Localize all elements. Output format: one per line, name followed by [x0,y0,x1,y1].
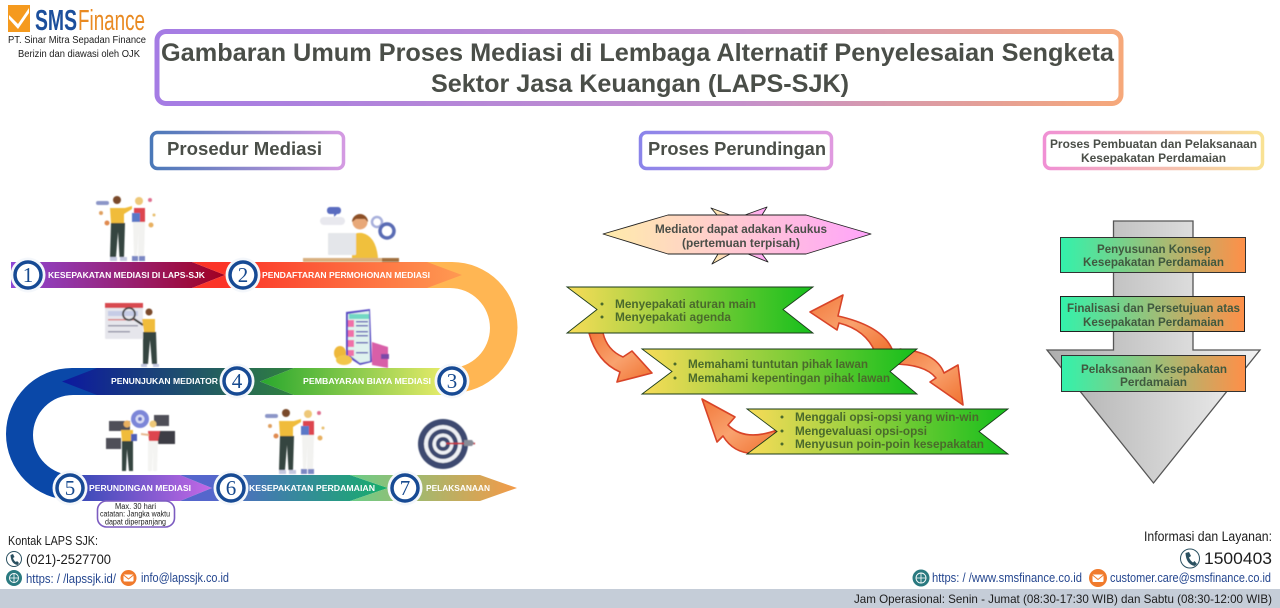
badge 4: 4 [232,369,243,393]
box: pelaksanaan kesepakatan: Pelaksanaan Kesepakatan [1081,362,1227,376]
note: max 30 hari: dapat diperpanjang [105,518,166,526]
ribbon: tuntutan dan kepentingan: Memahami kepentingan pihak lawan [688,371,890,385]
step 3 band: PEMBAYARAN BIAYA MEDIASI [303,377,431,386]
box: penyusunan konsep: Penyusunan Konsep [1097,242,1211,256]
logo: SMS Finance: SMS [35,5,77,37]
step 5 band [70,475,212,501]
badge 1 [10,258,46,292]
step 2 band [192,262,462,288]
icon: mail [1089,569,1107,587]
badge 6 [214,470,248,506]
ribbon: aturan main: Menyepakati aturan main [615,297,756,311]
badge 2: 2 [238,263,248,287]
heading: Prosedur Mediasi: Prosedur Mediasi [167,139,322,159]
title: Sektor Jasa Keuangan (LAPS-SJK) [431,70,849,98]
step 7 band [350,475,517,501]
step 1 band [11,262,225,288]
panel: procedure road [6,258,518,527]
logo: SMS Finance: Berizin dan diawasi oleh OJK [18,49,140,60]
box: finalisasi dan persetujuan: Kesepakatan Perdamaian [1083,315,1224,329]
step 6 band: KESEPAKATAN PERDAMAIAN [249,484,375,493]
icon: page and magnifier, step 4 [105,303,159,367]
logo: SMS Finance: Finance [78,5,145,37]
callout: kaukus star [603,207,871,264]
icon: two people, step 1 [96,196,156,261]
heading: Prosedur Mediasi [152,132,344,168]
contact: LAPS SJK: (021)-2527700 [26,552,111,567]
badge 6: 6 [226,476,236,500]
heading: Proses Perundingan [640,132,832,168]
contact: SMS Finance services: 1500403 [1204,549,1272,568]
note: max 30 hari [98,501,174,527]
contact: SMS Finance services: https: / /www.smsfinance.co.id [932,570,1082,585]
box: penyusunan konsep [1060,238,1246,272]
badge 2 [226,258,260,292]
arrow: big downward arrow [1047,221,1260,483]
icon: two people with charts, step 5 [106,410,175,471]
callout: kaukus star: Mediator dapat adakan Kaukus [655,224,827,236]
note: max 30 hari: Max. 30 hari [115,502,156,511]
step 4 band [62,368,294,395]
box: finalisasi dan persetujuan [1060,296,1244,332]
heading: Proses Pembuatan dan Pelaksanaan: Proses Pembuatan dan Pelaksanaan [1050,137,1257,151]
step 4 band: PENUNJUKAN MEDIATOR [111,377,218,386]
contact: SMS Finance services [912,529,1272,587]
box: penyusunan konsep: Kesepakatan Perdamaian [1083,255,1224,269]
footer bar [0,589,1280,608]
ribbon: opsi dan kesepakatan: Mengevaluasi opsi-opsi [795,424,927,438]
icon: phone large [1180,549,1200,568]
road curve: right [425,262,518,393]
icon: globe [6,570,22,586]
icon: call-centre operator, step 2 [303,207,399,262]
heading: Proses Pembuatan dan Pelaksanaan [1044,132,1262,168]
icon: globe [912,570,930,586]
step 6 band [180,475,388,501]
step 7 band: PELAKSANAAN [426,484,490,493]
road curve: left [6,368,110,500]
badge 5 [52,470,88,506]
logo: SMS Finance: PT. Sinar Mitra Sepadan Finance [8,35,146,46]
step 5 band: PERUNDINGAN MEDIASI [89,484,191,493]
contact: LAPS SJK: info@lapssjk.co.id [141,570,229,585]
note: max 30 hari: catatan: Jangka waktu [100,510,170,518]
arrow: ribbon 2 back to ribbon 1 [810,295,892,352]
badge 7 [388,470,422,506]
contact: LAPS SJK: Kontak LAPS SJK: [8,533,98,548]
icon: phone, wallet and coins, step 3 [334,309,389,368]
badge 3: 3 [447,369,457,393]
ribbon: opsi dan kesepakatan: Menggali opsi-opsi yang win-win [795,410,979,424]
box: pelaksanaan kesepakatan [1062,356,1246,392]
step 1 band: KESEPAKATAN MEDIASI DI LAPS-SJK [48,271,205,280]
title: Gambaran Umum Proses Mediasi di Lembaga Alternatif Penyelesaian Sengketa [161,39,1115,67]
step 2 band: PENDAFTARAN PERMOHONAN MEDIASI [262,271,430,280]
arrow: ribbon 2 to ribbon 3 [892,349,963,405]
contact: LAPS SJK [6,533,229,586]
badge 1: 1 [23,263,33,287]
badge 4 [220,364,254,398]
icon: phone [6,552,22,566]
ribbon: aturan main: Menyepakati agenda [615,310,731,324]
callout: kaukus star: (pertemuan terpisah) [682,238,800,250]
badge 3 [434,364,470,398]
title [157,32,1121,104]
ribbon: tuntutan dan kepentingan: Memahami tuntutan pihak lawan [688,357,868,371]
box: finalisasi dan persetujuan: Finalisasi dan Persetujuan atas [1067,301,1240,315]
footer bar: Jam Operasional: Senin - Jumat (08:30-17:30 WIB) dan Sabtu (08:30-12:00 WIB) [854,592,1272,606]
ribbon: opsi dan kesepakatan [747,409,1008,454]
heading: Proses Pembuatan dan Pelaksanaan: Kesepakatan Perdamaian [1081,151,1226,165]
badge 5: 5 [65,476,75,500]
icon: target with dart, step 7 [418,419,475,469]
ribbon: aturan main [567,287,813,333]
logo: SMS Finance [8,5,146,60]
ribbon: tuntutan dan kepentingan [642,349,917,394]
icon: two people, step 6 [265,409,324,474]
badge 7: 7 [400,476,410,500]
icon: mail [120,570,136,586]
heading: Proses Perundingan: Proses Perundingan [648,139,826,159]
arrow: ribbon 1 to ribbon 2 [589,333,652,382]
box: pelaksanaan kesepakatan: Perdamaian [1120,375,1187,389]
step 3 band [260,368,445,395]
arrow: ribbon 3 to ribbon 2 [702,399,777,453]
ribbon: opsi dan kesepakatan: Menyusun poin-poin kesepakatan [795,437,984,451]
contact: LAPS SJK: https: / /lapssjk.id/ [26,571,116,586]
